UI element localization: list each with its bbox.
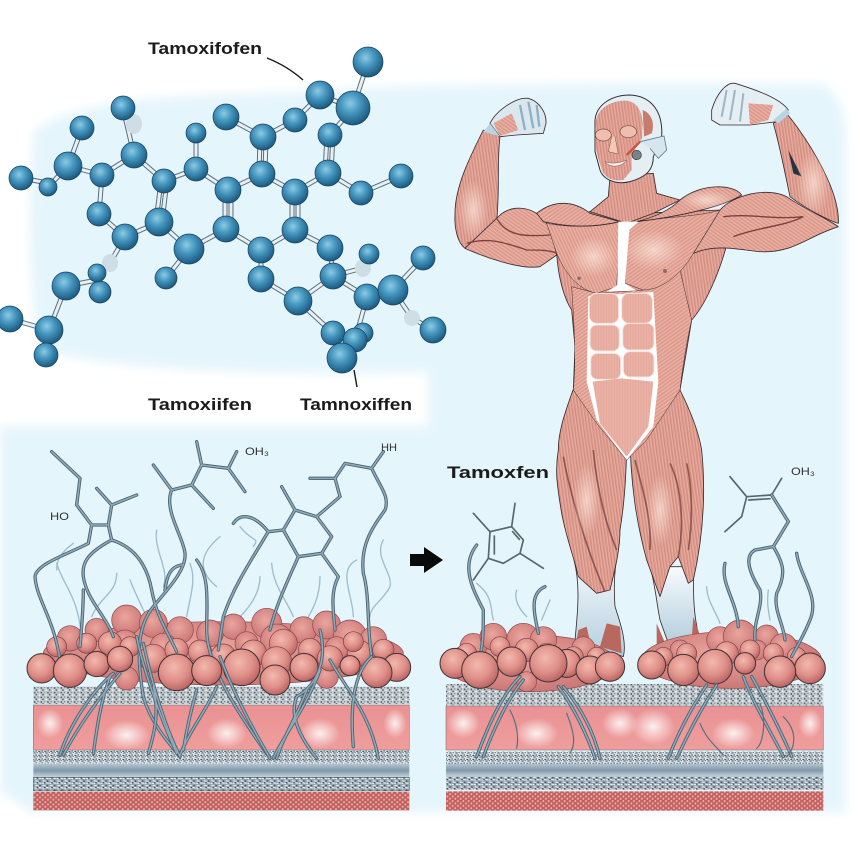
left trapezius shoulder <box>537 203 620 226</box>
nipples <box>577 269 667 280</box>
right arm divisions <box>723 216 803 237</box>
right leg <box>630 390 704 647</box>
benzene ring and right chain <box>473 477 788 580</box>
molecule hydrogen atoms <box>102 114 420 326</box>
thin fine fibres <box>510 703 794 757</box>
head <box>595 95 667 183</box>
label: HO: HO <box>50 511 70 523</box>
tissue lobes back row <box>443 620 822 692</box>
left pectoral <box>547 222 620 293</box>
leader line: bottom label <box>354 370 357 387</box>
right forearm <box>773 113 838 223</box>
leader line: top label <box>267 58 303 80</box>
upper fibres <box>469 495 813 657</box>
panel: molecule <box>0 47 446 373</box>
tissue layers <box>33 687 409 810</box>
lower fibres through tissue <box>60 630 378 758</box>
upper body <box>455 83 838 460</box>
lower fibres through tissue <box>477 677 792 758</box>
left upper arm <box>465 208 557 267</box>
tissue lobes middle row <box>457 637 806 667</box>
left fist <box>483 98 546 137</box>
legs <box>557 390 704 657</box>
tissue lobes middle row <box>47 629 394 677</box>
molecule atoms <box>0 47 446 373</box>
arrow <box>410 547 443 573</box>
tissue lobes front row <box>27 646 411 695</box>
neck <box>590 173 680 223</box>
tissue lobes back row <box>43 605 403 690</box>
abdomen white frame <box>587 292 658 460</box>
sternum <box>607 222 638 292</box>
label: molecule right caption: Tamnoxiffen <box>300 395 412 414</box>
panel: left tissue with fibres <box>27 442 411 810</box>
upper fibres and molecular chains <box>35 442 386 758</box>
tissue lobes front row <box>440 645 825 688</box>
label: HH: HH <box>381 442 397 454</box>
panel: muscular figure <box>455 83 838 657</box>
right upper arm <box>693 192 838 253</box>
muscle highlights <box>458 150 830 277</box>
left forearm <box>455 130 500 248</box>
panel: right tissue base <box>446 477 823 811</box>
right deltoid <box>637 187 742 222</box>
lower abdominal muscle <box>593 378 653 457</box>
right fist <box>712 83 790 125</box>
right tissue lobes and fibres <box>440 495 825 758</box>
abdominal muscles <box>589 293 654 379</box>
right triceps shadow <box>788 150 802 177</box>
torso silhouette <box>550 210 727 460</box>
label: molecule left caption: Tamoxiifen <box>148 395 252 414</box>
right pectoral <box>625 210 720 290</box>
left arm divisions <box>467 218 557 253</box>
tissue layers <box>446 684 823 811</box>
molecule bonds <box>10 62 433 358</box>
faint fibres <box>57 527 390 643</box>
label: OH3 left: OH₃ <box>245 446 269 458</box>
abdomen side muscles <box>572 270 692 460</box>
label: top molecule: Tamoxifofen <box>148 39 262 58</box>
left leg <box>557 390 627 657</box>
label: OH3 right: OH₃ <box>791 466 815 478</box>
faint fibres <box>477 583 770 623</box>
label: figure caption: Tamoxfen <box>447 463 549 482</box>
